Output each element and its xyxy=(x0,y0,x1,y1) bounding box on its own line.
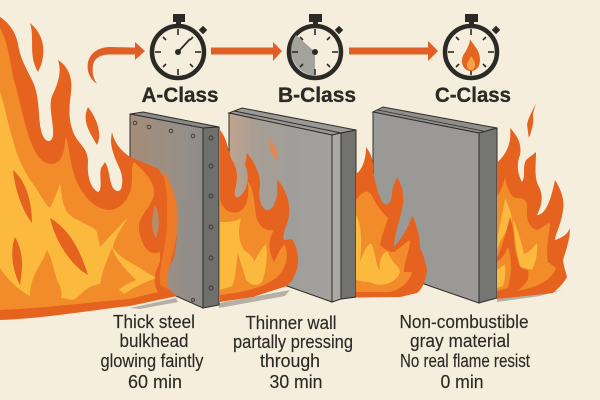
stopwatch: C-Class 0 min with flame xyxy=(445,14,500,78)
caption: A-Class: Thick steel xyxy=(113,312,195,332)
caption: B-Class: Thinner wall xyxy=(246,313,336,333)
flame tongues detached xyxy=(30,23,99,145)
flames: between B and C xyxy=(356,147,427,297)
flames: right of wall C xyxy=(497,103,570,299)
flames: between A and B xyxy=(220,130,298,302)
caption: B-Class: 30 min xyxy=(270,372,322,392)
wall A: thick steel bulkhead xyxy=(130,112,219,308)
caption: C-Class: No real flame resist xyxy=(400,351,530,371)
stopwatch: B-Class 30 min xyxy=(289,14,343,78)
caption: B-Class: partally pressing xyxy=(233,332,353,352)
wall A side with rivets xyxy=(133,121,219,308)
small flame mark on wall B xyxy=(269,138,278,162)
heading: B-Class: B-Class xyxy=(278,84,356,107)
arrow: B to C xyxy=(349,41,438,61)
caption: B-Class xyxy=(233,313,353,392)
wall B: thinner wall xyxy=(229,108,356,302)
caption: A-Class xyxy=(100,312,204,392)
caption: B-Class: through xyxy=(260,351,320,371)
caption: A-Class: 60 min xyxy=(128,372,182,392)
flames: left large fire xyxy=(0,17,203,320)
wall C: non-combustible gray material xyxy=(373,107,497,303)
heading: A-Class: A-Class xyxy=(142,84,218,107)
heading: C-Class: C-Class xyxy=(435,84,511,107)
wall shadows xyxy=(130,288,562,309)
caption: C-Class: gray material xyxy=(410,331,510,351)
arrow: A to B xyxy=(211,42,282,61)
caption: C-Class xyxy=(400,312,530,392)
arrow: curved into A-Class xyxy=(88,42,145,84)
caption: A-Class: bulkhead xyxy=(120,331,188,351)
stopwatch: A-Class 60 min xyxy=(152,14,207,78)
caption: C-Class: 0 min xyxy=(440,372,484,392)
caption: A-Class: glowing faintly xyxy=(100,351,204,371)
caption: C-Class: Non-combustible xyxy=(400,312,528,332)
